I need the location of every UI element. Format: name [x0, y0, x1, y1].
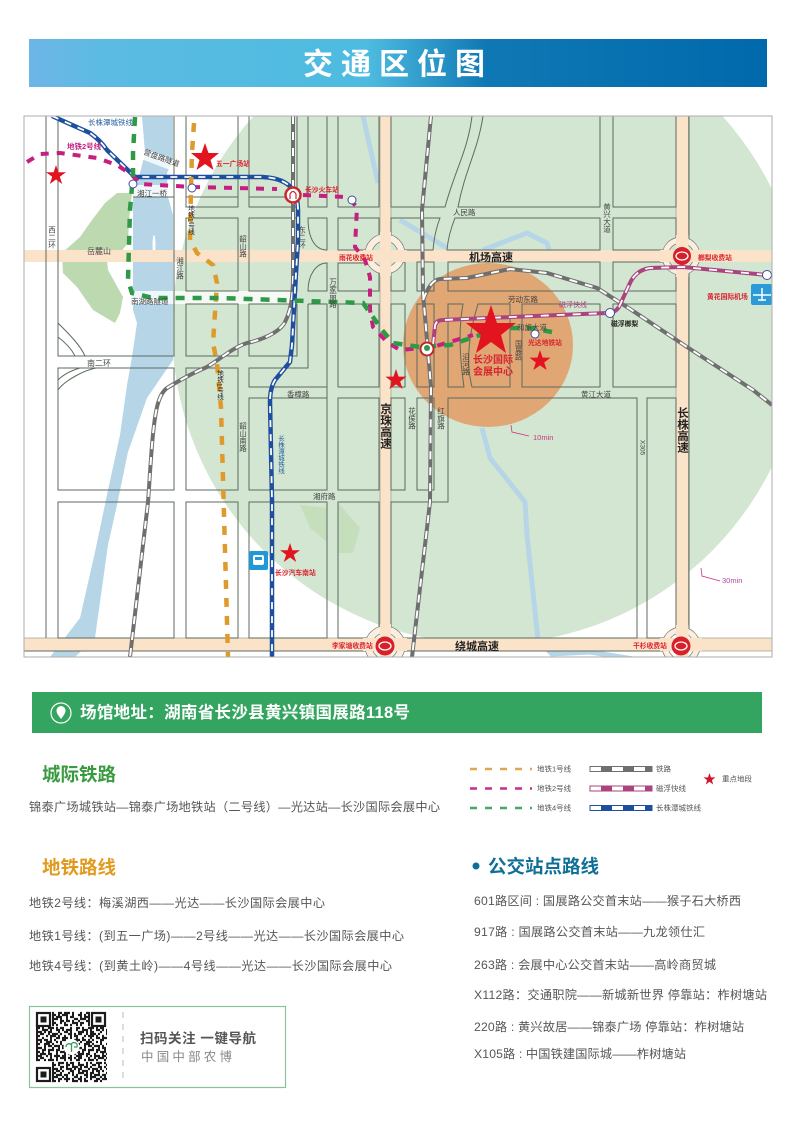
station markers — [129, 180, 772, 338]
QR code — [36, 1013, 107, 1081]
map labels: 黄花国际机场 — [707, 292, 748, 301]
map labels: X305 — [638, 440, 646, 456]
legend: 地铁4号线 — [537, 802, 572, 812]
bus routes section: 220路 : 黄兴故居——锦泰广场 停靠站：柞树塘站 — [474, 1019, 744, 1034]
map labels: 和旅大道 — [517, 322, 547, 332]
legend: 铁路 — [656, 764, 671, 774]
metro routes section: 地铁路线 — [42, 857, 116, 878]
map labels: 香樟路 — [287, 389, 310, 399]
map labels: 湘江一桥 — [137, 188, 167, 198]
QR code card: 中国中部农博 — [141, 1049, 232, 1064]
map labels: 长株潭城铁线 — [276, 434, 285, 474]
white road bands — [131, 147, 290, 304]
intercity rail section — [29, 764, 440, 814]
key location stars — [46, 143, 550, 562]
map labels: 长沙火车站 — [305, 185, 339, 194]
map labels: 五一广场站 — [216, 159, 250, 168]
metro line 2 — [27, 153, 473, 350]
map labels: 营盘路隧道 — [142, 146, 181, 169]
bus routes section: 601路区间 : 国展路公交首末站——猴子石大桥西 — [474, 893, 741, 908]
address bar — [32, 692, 762, 733]
QR code card — [30, 1006, 286, 1088]
icon: airport — [751, 284, 772, 305]
roundabouts — [363, 232, 702, 666]
map labels: 南二环 — [87, 358, 111, 368]
map panel — [24, 116, 772, 656]
intercity rail section: 锦泰广场城铁站—锦泰广场地铁站（二号线）—光达站—长沙国际会展中心 — [29, 799, 440, 814]
map labels — [47, 117, 748, 653]
legend: 磁浮快线 — [656, 783, 686, 793]
address bar: 场馆地址：湖南省长沙县黄兴镇国展路118号 — [80, 702, 410, 722]
river — [50, 116, 640, 660]
map labels: 长株高速 — [676, 406, 689, 454]
title banner: 交通区位图 — [303, 48, 485, 82]
map labels: 10min — [533, 433, 553, 442]
icon: location pin — [51, 703, 71, 723]
map labels: 干杉收费站 — [633, 641, 667, 650]
map labels: 光达地铁站 — [528, 338, 562, 347]
map labels: 国展路 — [514, 340, 522, 362]
green patches — [300, 503, 360, 553]
map labels: 韶山路 — [238, 234, 248, 258]
toll station icons — [376, 247, 691, 656]
railway lines — [130, 116, 772, 657]
map labels: 磁浮快线 — [559, 300, 587, 309]
map labels: 韶山南路 — [238, 421, 248, 452]
map labels: 万家丽路 — [328, 278, 338, 308]
legend: 长株潭城铁线 — [656, 802, 701, 812]
metro line 1 — [190, 123, 228, 657]
map labels: 雨花收费站 — [339, 253, 373, 262]
map labels: 榔梨收费站 — [698, 253, 732, 262]
metro routes section — [29, 857, 404, 973]
map labels: 长沙汽车南站 — [275, 568, 316, 577]
bus routes section: X112路：交通职院——新城新世界 停靠站：柞树塘站 — [474, 987, 767, 1002]
QR code card: 扫码关注 一键导航 — [140, 1030, 256, 1046]
map labels: 绕城高速 — [455, 639, 499, 653]
icon: Changsha railway station — [286, 188, 300, 202]
maglev line — [433, 267, 767, 345]
legend — [470, 764, 752, 812]
10 minute leader — [511, 425, 529, 436]
road blocks — [24, 116, 689, 651]
icon: transfer station — [420, 342, 434, 356]
30 minute zone — [173, 116, 772, 638]
mountain: Yuelu — [62, 193, 132, 323]
map labels: 红旗路 — [436, 406, 446, 430]
map labels: 花侯路 — [407, 406, 416, 430]
map labels: 30min — [722, 576, 742, 585]
map labels: 人民路 — [453, 207, 476, 217]
map labels: 地铁2号线 — [67, 141, 102, 151]
intercity rail line — [52, 116, 298, 657]
bus routes section — [472, 856, 767, 1061]
map labels: 地铁1号线 — [186, 204, 195, 235]
legend: 重点地段 — [722, 774, 752, 784]
expressways — [20, 110, 780, 665]
map labels: 沿河路 — [461, 353, 470, 376]
legend: 地铁1号线 — [537, 764, 572, 774]
map labels: 湘江路 — [175, 257, 184, 280]
map labels: 机场高速 — [469, 250, 513, 264]
title banner — [29, 39, 767, 87]
icon: bus station — [249, 551, 268, 570]
metro line 4 — [128, 117, 552, 347]
map labels: 李家塘收费站 — [332, 641, 373, 650]
map labels: 南湖路隧道 — [131, 296, 169, 306]
map labels: 地铁1号线 — [216, 369, 224, 400]
metro routes section: 地铁2号线：梅溪湖西——光达——长沙国际会展中心 — [29, 895, 325, 910]
intercity rail section: 城际铁路 — [42, 764, 117, 785]
map labels: 西二环 — [47, 226, 56, 250]
map labels: 会展中心 — [473, 365, 513, 378]
map labels: 磁浮榔梨 — [611, 319, 638, 328]
map labels: 京珠高速 — [379, 402, 392, 450]
legend: 地铁2号线 — [537, 783, 572, 793]
metro routes section: 地铁1号线：(到五一广场)——2号线——光达——长沙国际会展中心 — [29, 928, 404, 943]
bus routes section: X105路 : 中国铁建国际城——柞树塘站 — [474, 1046, 686, 1061]
map labels: 黄兴大道 — [602, 202, 612, 234]
map labels: 岳麓山 — [87, 246, 111, 256]
metro routes section: 地铁4号线：(到黄土岭)——4号线——光达——长沙国际会展中心 — [29, 958, 392, 973]
30 minute leader — [701, 568, 720, 581]
map labels: 劳动东路 — [508, 294, 538, 304]
bus routes section: 263路 : 会展中心公交首末站——高岭商贸城 — [474, 957, 716, 972]
map labels: 长株潭城铁线 — [88, 117, 133, 127]
map labels: 黄江大道 — [581, 389, 611, 399]
map labels: 东二环 — [297, 225, 306, 250]
map labels: 湘府路 — [313, 491, 336, 501]
bus routes section: 公交站点路线 — [488, 856, 599, 877]
map frame — [24, 116, 772, 657]
bus routes section: 917路 : 国展路公交首末站——九龙领仕汇 — [474, 924, 705, 939]
map labels: 长沙国际 — [473, 353, 513, 366]
10 minute zone — [403, 263, 573, 427]
